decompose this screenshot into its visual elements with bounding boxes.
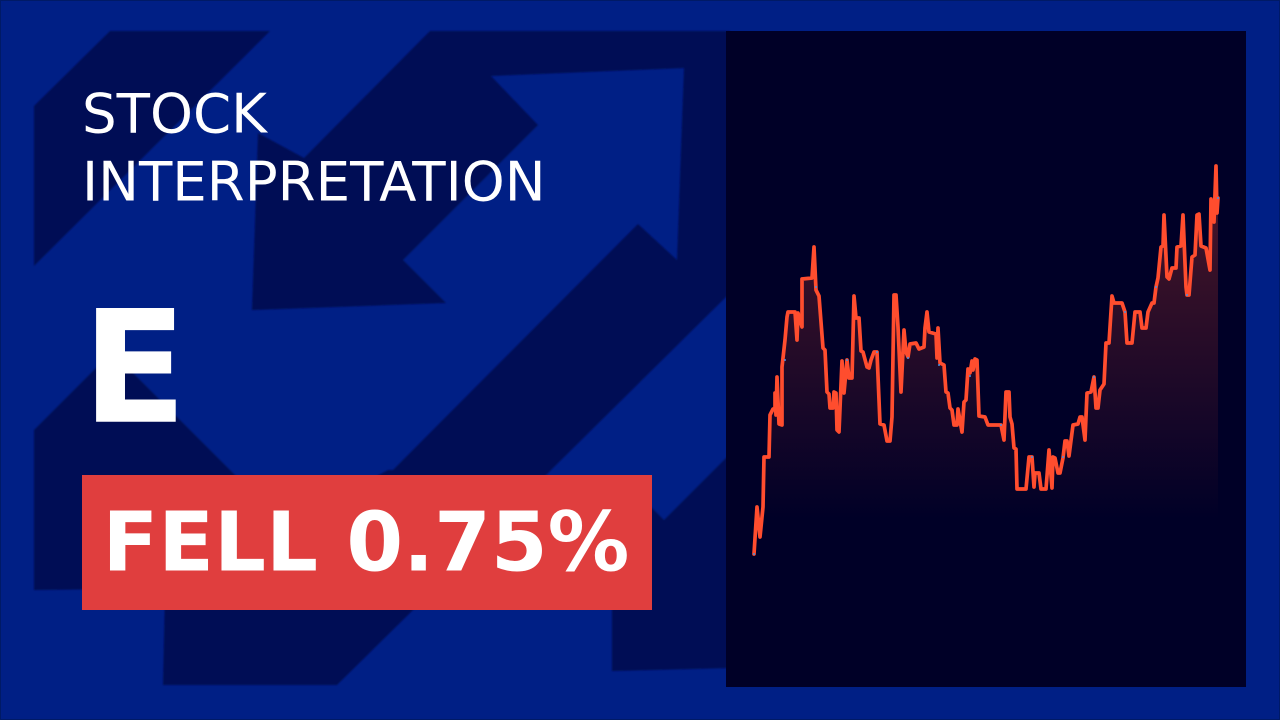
- title: INTERPRETATION: [82, 150, 546, 214]
- change badge: [82, 475, 652, 610]
- ticker symbol: E: [82, 277, 187, 459]
- change badge: FELL 0.75%: [102, 496, 629, 591]
- title: [82, 82, 546, 214]
- title: STOCK: [82, 82, 268, 146]
- background arrows: [34, 31, 730, 685]
- price line: [754, 166, 1218, 554]
- chart panel: [726, 31, 1246, 687]
- area fill: [754, 166, 1218, 554]
- data point markers: [753, 197, 1219, 555]
